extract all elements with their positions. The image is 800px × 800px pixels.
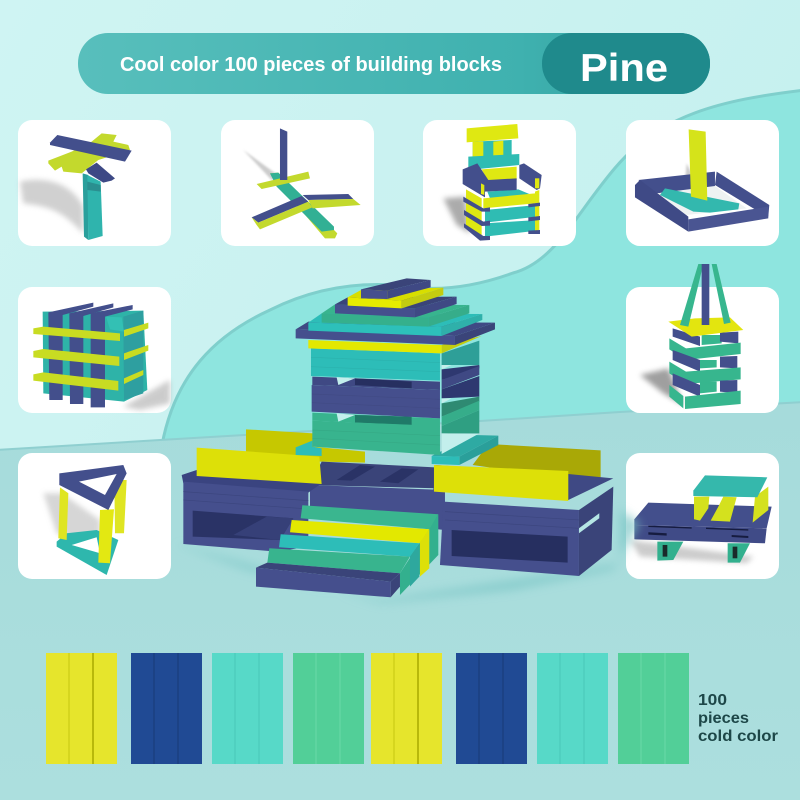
base platform [182,462,613,576]
front stairs [256,505,438,597]
panel: plane build [221,120,374,246]
header title: Cool color 100 pieces of building blocks [120,54,502,76]
central building [173,278,640,603]
swatch: yellow [46,653,117,764]
header bar [78,33,710,94]
swatch: navy 2 [456,653,527,764]
swatch caption: cold color [698,728,778,745]
tower [311,341,479,455]
swatch: yellow 2 [371,653,442,764]
panel: triangular prism build [18,453,171,579]
panel: lattice build [18,287,171,413]
swatch caption: pieces [698,710,749,727]
swatch caption [698,692,778,745]
panel: tower build [626,264,779,413]
swatch: teal [212,653,283,764]
swatch: green [293,653,364,764]
header label Pine: Pine [580,47,668,90]
soft ground shadow [173,510,640,603]
colour swatches [46,653,689,764]
panel: bench build [626,453,779,579]
panel: chair build [423,120,576,246]
back yellow walls [246,429,601,477]
swatch: green 2 [618,653,689,764]
panel: T-shaped build [18,120,171,246]
panel: frame build [626,120,779,246]
feet planks [296,435,498,465]
roof tiers [296,278,495,353]
front yellow walls [197,448,568,501]
swatch caption: 100 [698,692,727,709]
swatch: navy [131,653,202,764]
header pill: Pine [542,33,710,94]
swatch: teal 2 [537,653,608,764]
